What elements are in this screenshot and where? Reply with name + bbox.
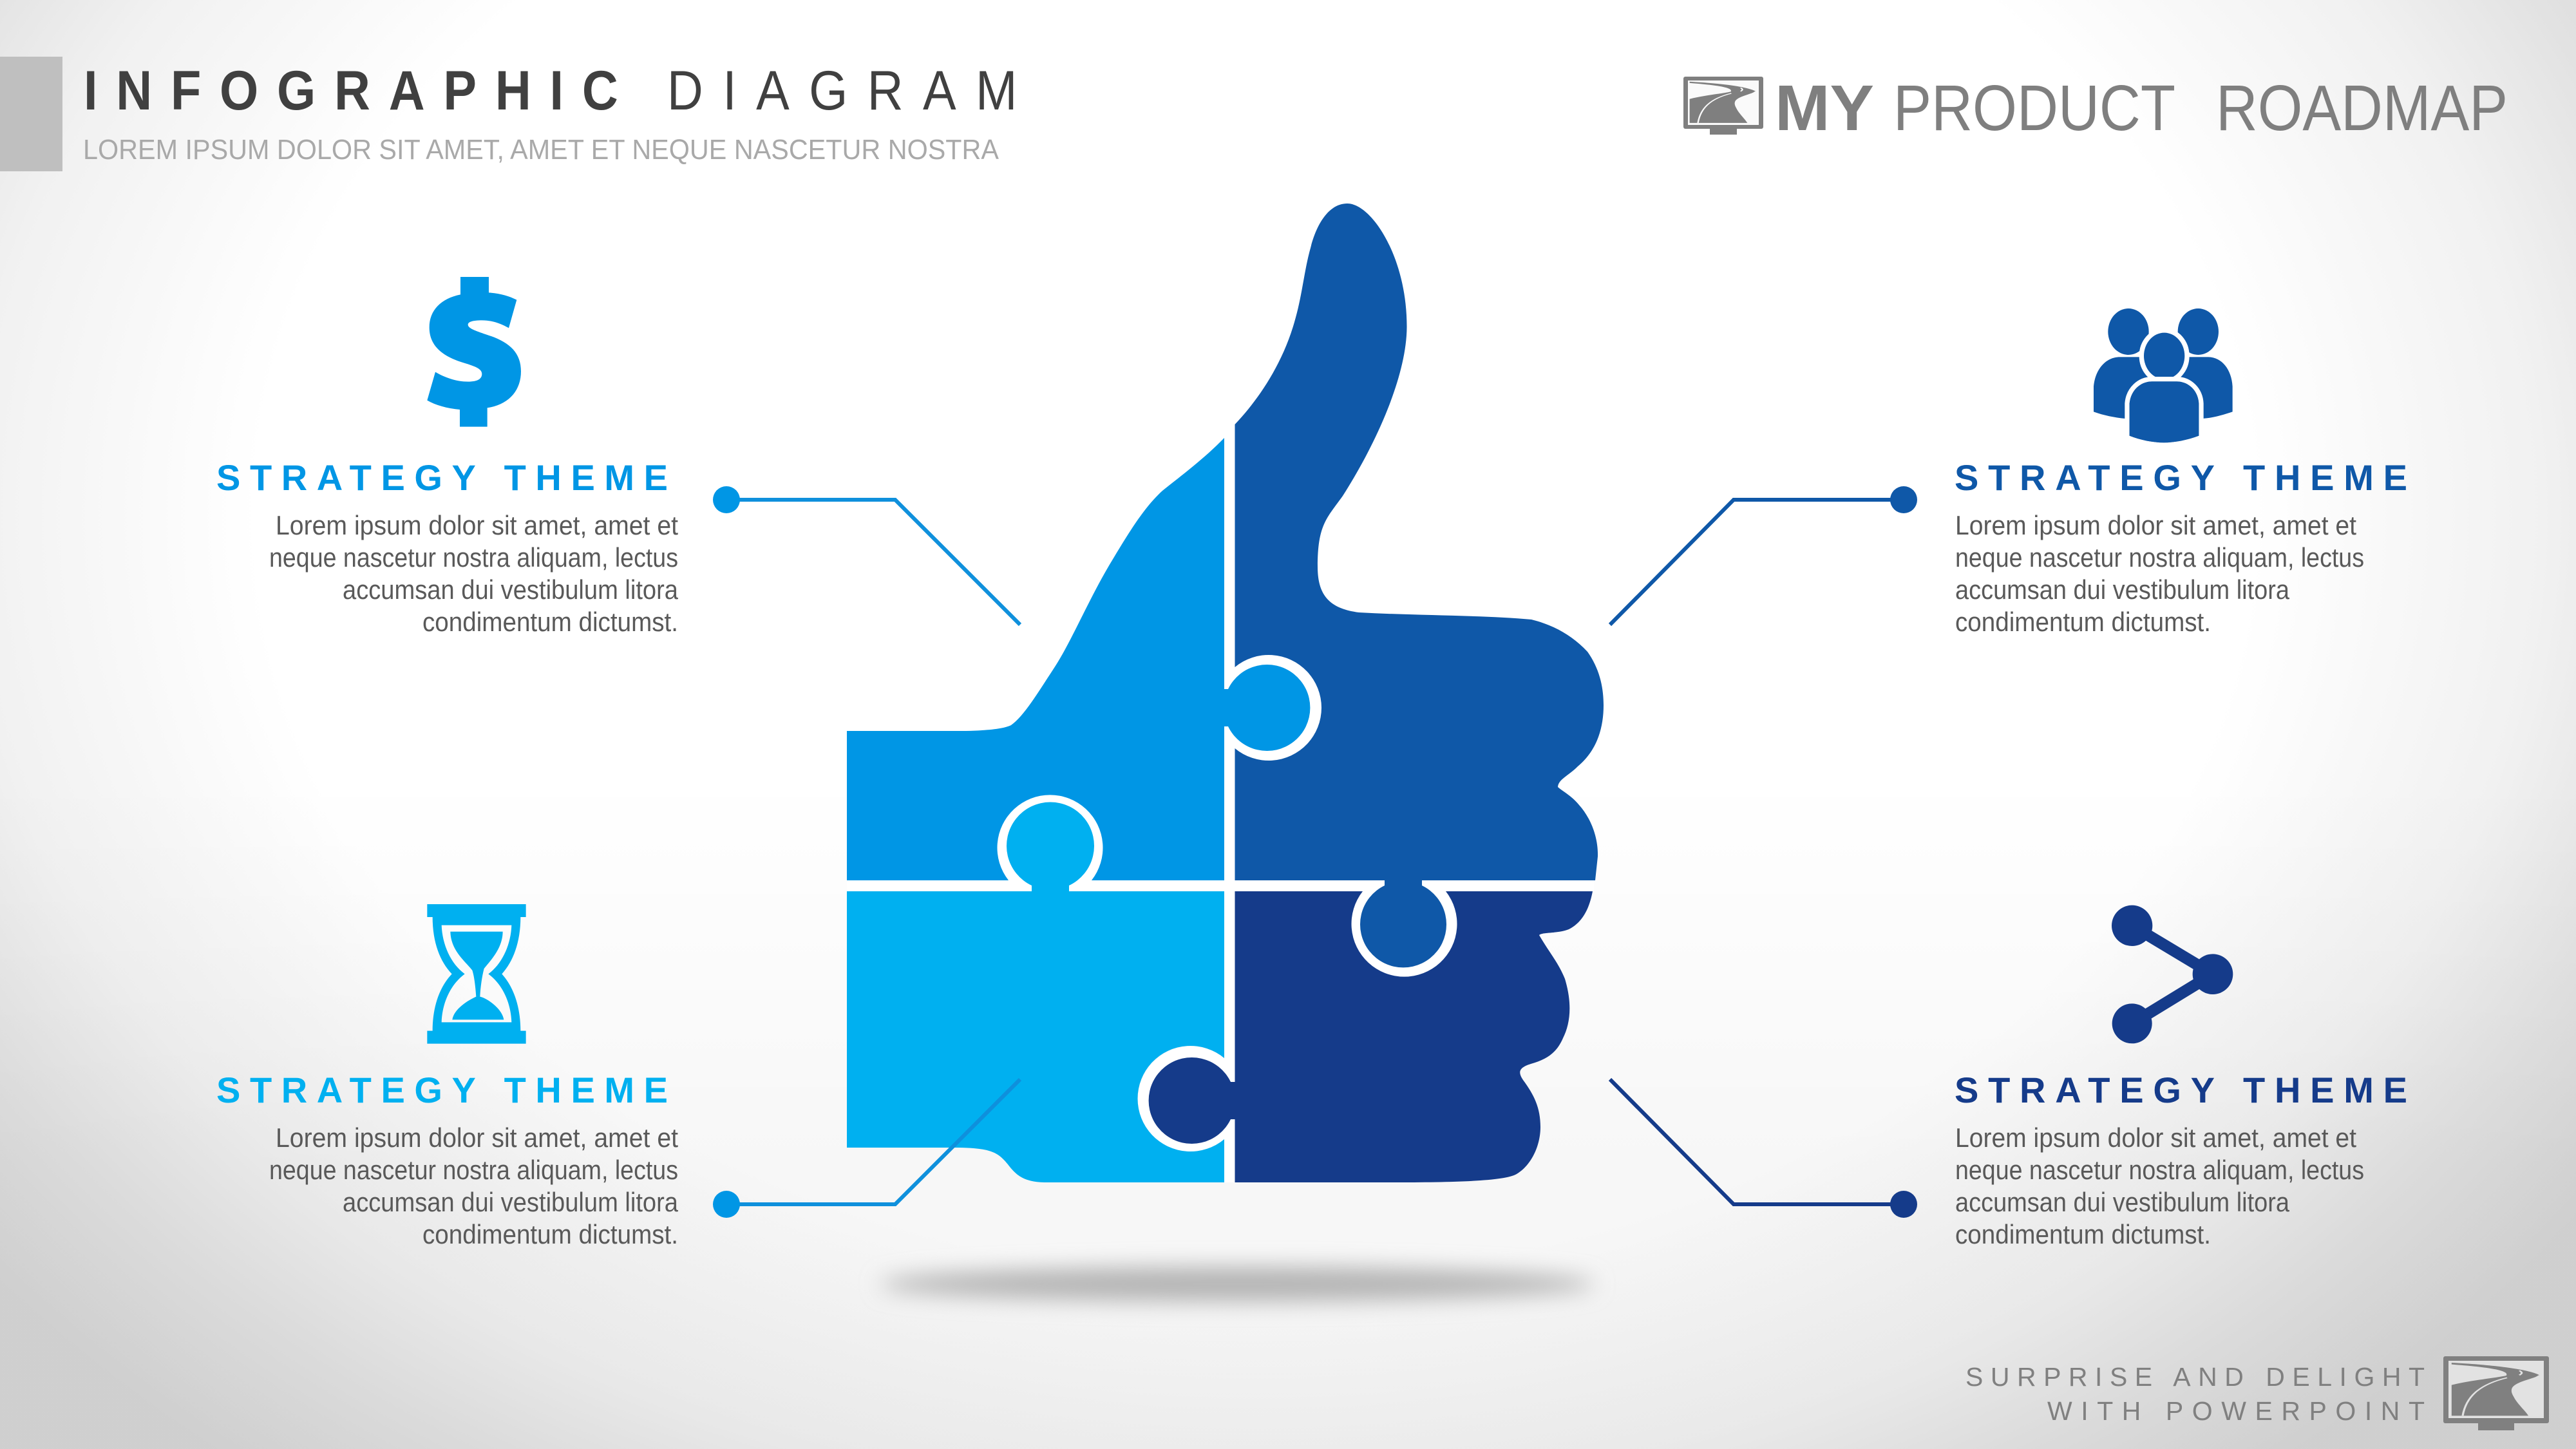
title: DIAGRAM (667, 60, 1018, 122)
brand name (1775, 72, 2508, 144)
brand name: ROADMAP (2216, 72, 2508, 144)
footer tagline: SURPRISE AND DELIGHT (1965, 1362, 2425, 1392)
callout line: bottom left (713, 1079, 1020, 1218)
header accent block (0, 57, 62, 171)
puzzle piece: bottom right (1149, 891, 1593, 1182)
puzzle piece: top right (1235, 204, 1604, 967)
text block: bottom left: accumsan dui vestibulum litora (343, 1187, 679, 1217)
text block: top left: Lorem ipsum dolor sit amet, amet et (276, 510, 678, 540)
icon: people group (2094, 308, 2233, 442)
heading: bottom right theme: STRATEGY THEME (1955, 1070, 2407, 1110)
icon: hourglass (427, 904, 526, 1044)
text block: top left (269, 510, 679, 637)
text block: bottom left: Lorem ipsum dolor sit amet, amet et (276, 1122, 678, 1153)
title (84, 60, 1018, 122)
text block: bottom left: condimentum dictumst. (422, 1219, 678, 1249)
text block: bottom right: condimentum dictumst. (1955, 1219, 2211, 1249)
icon: share nodes (2112, 905, 2233, 1043)
text block: bottom right: Lorem ipsum dolor sit amet, amet et (1955, 1122, 2356, 1153)
callout line: top right (1610, 486, 1917, 625)
text block: top right (1955, 510, 2364, 637)
heading: bottom left theme: STRATEGY THEME (216, 1070, 668, 1110)
text block: bottom right: neque nascetur nostra aliquam, lectus (1955, 1155, 2364, 1185)
title: INFOGRAPHIC (84, 60, 618, 122)
icon: footer road monitor (2443, 1356, 2549, 1430)
text block: top left: condimentum dictumst. (422, 607, 678, 637)
text block: bottom right (1955, 1122, 2364, 1249)
thumb shadow (880, 1267, 1595, 1302)
text block: top right: Lorem ipsum dolor sit amet, amet et (1955, 510, 2356, 540)
heading: top right theme: STRATEGY THEME (1955, 457, 2407, 498)
callout line: bottom right (1610, 1079, 1917, 1218)
thumbs-up puzzle (847, 204, 1604, 1182)
puzzle piece: bottom left (847, 802, 1224, 1182)
footer tagline: WITH POWERPOINT (2047, 1396, 2425, 1426)
text block: bottom left (269, 1122, 679, 1249)
text block: bottom left: neque nascetur nostra aliquam, lectus (269, 1155, 678, 1185)
text block: top right: neque nascetur nostra aliquam, lectus (1955, 542, 2364, 573)
text block: top right: condimentum dictumst. (1955, 607, 2211, 637)
text block: top right: accumsan dui vestibulum litora (1955, 574, 2290, 605)
puzzle piece: top left (847, 438, 1310, 880)
brand name: PRODUCT (1893, 72, 2175, 144)
callout line: top left (713, 486, 1020, 625)
subtitle: LOREM IPSUM DOLOR SIT AMET, AMET ET NEQUE NASCETUR NOSTRA (83, 134, 999, 166)
brand name: MY (1775, 72, 1874, 144)
text block: bottom right: accumsan dui vestibulum litora (1955, 1187, 2290, 1217)
text block: top left: neque nascetur nostra aliquam, lectus (269, 542, 678, 573)
icon: dollar sign (427, 277, 521, 427)
footer tagline (1965, 1362, 2425, 1426)
brand logo: my product roadmap (1683, 72, 2508, 144)
heading: top left theme: STRATEGY THEME (216, 457, 668, 498)
icon: road monitor (1683, 77, 1763, 135)
text block: top left: accumsan dui vestibulum litora (343, 574, 679, 605)
